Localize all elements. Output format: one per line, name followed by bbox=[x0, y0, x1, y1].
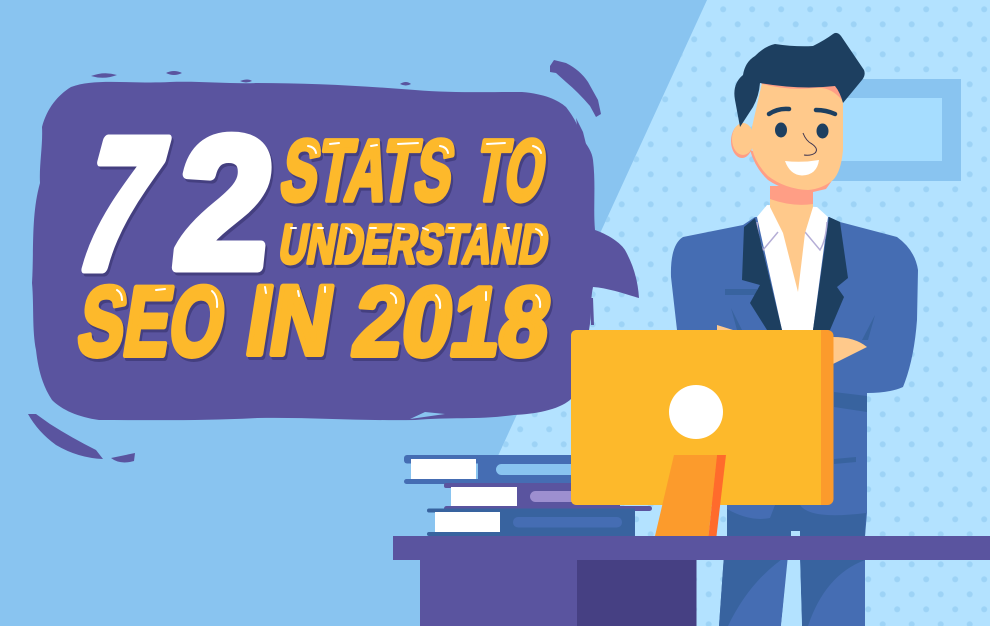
jacket shading bbox=[725, 289, 875, 536]
book top bbox=[404, 455, 579, 484]
jacket bbox=[671, 217, 918, 536]
number 72: 7 bbox=[56, 101, 184, 308]
hands bbox=[717, 325, 867, 364]
dotted wall panel bbox=[420, 0, 990, 626]
book middle bbox=[444, 483, 652, 511]
number 72 bbox=[56, 98, 283, 308]
trouser gap below desk bbox=[781, 560, 802, 626]
line: stats to: TO bbox=[470, 124, 553, 219]
letter highlights bbox=[117, 143, 542, 308]
brush marks around the bubble bbox=[28, 60, 601, 462]
man bbox=[671, 33, 918, 626]
ear bbox=[731, 123, 754, 158]
desk bbox=[393, 536, 990, 626]
lapels bbox=[742, 217, 848, 330]
hairline shadow bbox=[760, 82, 842, 100]
neck bbox=[770, 188, 813, 292]
shirt bbox=[757, 205, 828, 330]
hair bbox=[734, 33, 865, 127]
window frame bbox=[800, 79, 961, 181]
smile bbox=[785, 160, 819, 176]
line: seo in 2018: 2018 bbox=[347, 268, 558, 376]
line: seo in 2018: SEO bbox=[72, 267, 233, 376]
face bbox=[752, 83, 843, 190]
books stack bbox=[404, 455, 652, 536]
nose bbox=[803, 133, 816, 155]
webcam circle bbox=[669, 385, 723, 439]
monitor bbox=[571, 330, 834, 536]
legs bbox=[719, 555, 865, 626]
line: seo in 2018 bbox=[72, 266, 558, 376]
speech bubble bbox=[28, 60, 639, 462]
line: seo in 2018: IN bbox=[240, 266, 341, 375]
book bottom bbox=[427, 508, 635, 536]
jaw shadow bbox=[750, 150, 836, 192]
number 72: 2 bbox=[167, 98, 283, 307]
neck shadow bbox=[770, 186, 813, 205]
eyebrows bbox=[769, 109, 835, 114]
collar lines bbox=[757, 222, 827, 250]
stand edge bbox=[708, 455, 726, 536]
trouser gap bbox=[791, 531, 800, 536]
light highlight on bubble bottom edge bbox=[410, 412, 445, 419]
line: understand: UNDERSTAND bbox=[275, 213, 554, 275]
line: stats to: STATS bbox=[275, 124, 461, 219]
eyes bbox=[775, 122, 828, 138]
headline bbox=[56, 98, 558, 376]
monitor stand bbox=[655, 455, 717, 536]
